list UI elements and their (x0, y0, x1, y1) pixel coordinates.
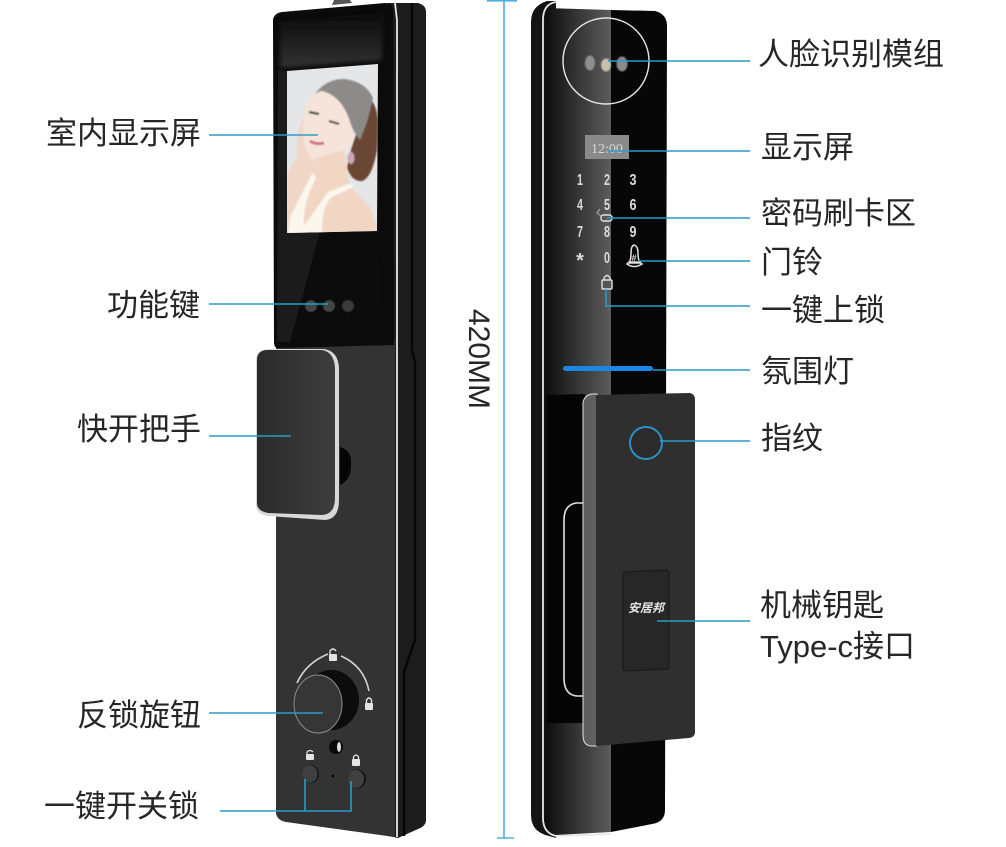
glass face left half (545, 8, 611, 835)
dress (288, 172, 355, 234)
key cover (623, 570, 669, 671)
label: doorbell: 门铃 (761, 245, 823, 280)
face module lenses (585, 56, 628, 72)
one-touch lock icon (602, 276, 612, 289)
outer body (531, 1, 556, 838)
dial lock icon (365, 698, 373, 710)
label: face module: 人脸识别模组 (758, 37, 944, 72)
keypad: 4 (577, 197, 583, 214)
photo background (285, 62, 380, 234)
face (303, 91, 354, 160)
left lock: indoor side (256, 0, 426, 838)
function keys (305, 300, 354, 312)
keypad (576, 172, 637, 272)
hair brown (347, 92, 378, 181)
body edge highlight (543, 2, 611, 836)
keypad: 3 (630, 172, 637, 189)
fingerprint sensor (630, 427, 662, 459)
keypad: 2 (604, 172, 610, 189)
doorbell icon (627, 245, 642, 266)
anti-lock knob (294, 670, 359, 733)
outdoor handle (583, 393, 695, 746)
body panel (276, 340, 395, 837)
keypad: 1 (577, 172, 583, 189)
dimension line: 420MM (462, 0, 517, 838)
card swipe icon (597, 209, 612, 221)
unlock button (302, 750, 319, 783)
label: ambient light: 氛围灯 (761, 354, 854, 389)
lock dial arc (297, 654, 369, 691)
right lock: outdoor side (531, 1, 695, 838)
quick-open handle (256, 349, 339, 520)
display screen: 12:00 (591, 142, 623, 157)
doorbell icon: # (631, 253, 637, 263)
label: anti-lock knob: 反锁旋钮 (77, 698, 201, 733)
handle recess (340, 447, 351, 485)
label: quick-open handle: 快开把手 (77, 412, 201, 447)
brand logo: 安居邦 (628, 601, 666, 615)
label: one-touch switch lock: 一键开关锁 (44, 789, 199, 824)
callout lines (209, 61, 750, 811)
keypad: 7 (577, 224, 583, 241)
display screen (585, 135, 629, 159)
handle grip outline (564, 503, 584, 696)
label: password and card area: 密码刷卡区 (761, 196, 916, 231)
panel: indoor display photo (285, 62, 380, 234)
label: fingerprint: 指纹 (761, 421, 823, 456)
face recognition ring (563, 18, 649, 104)
lock button (348, 755, 366, 788)
earring (348, 152, 354, 164)
label: mechanical key: 机械钥匙 (760, 588, 884, 623)
keypad: 0 (604, 250, 610, 267)
keypad: 6 (630, 197, 637, 214)
handle cavity (547, 394, 585, 723)
neck and shoulder (300, 150, 378, 234)
label: indoor display: 室内显示屏 (46, 116, 201, 151)
dial unlock icon (329, 649, 337, 661)
label: one-touch lock: 一键上锁 (761, 293, 885, 328)
key hole (329, 740, 343, 754)
keypad: 8 (604, 224, 610, 241)
hair grey (312, 79, 373, 140)
label: display: 显示屏 (761, 130, 854, 165)
arm and hand (286, 117, 316, 234)
keypad: 5 (604, 197, 610, 214)
dimension text: 420MM (462, 309, 495, 409)
eyes and lips (309, 112, 339, 124)
glass face right half (611, 10, 667, 832)
ambient light bar (563, 366, 653, 371)
side rail (388, 3, 426, 838)
top pin (332, 0, 352, 5)
label: function keys: 功能键 (107, 288, 200, 323)
keypad: 9 (630, 224, 637, 241)
label: Type-C port: Type-c接口 (760, 629, 915, 664)
glass screen panel (273, 3, 394, 348)
edge highlight (395, 3, 397, 837)
keypad: * (576, 250, 584, 272)
